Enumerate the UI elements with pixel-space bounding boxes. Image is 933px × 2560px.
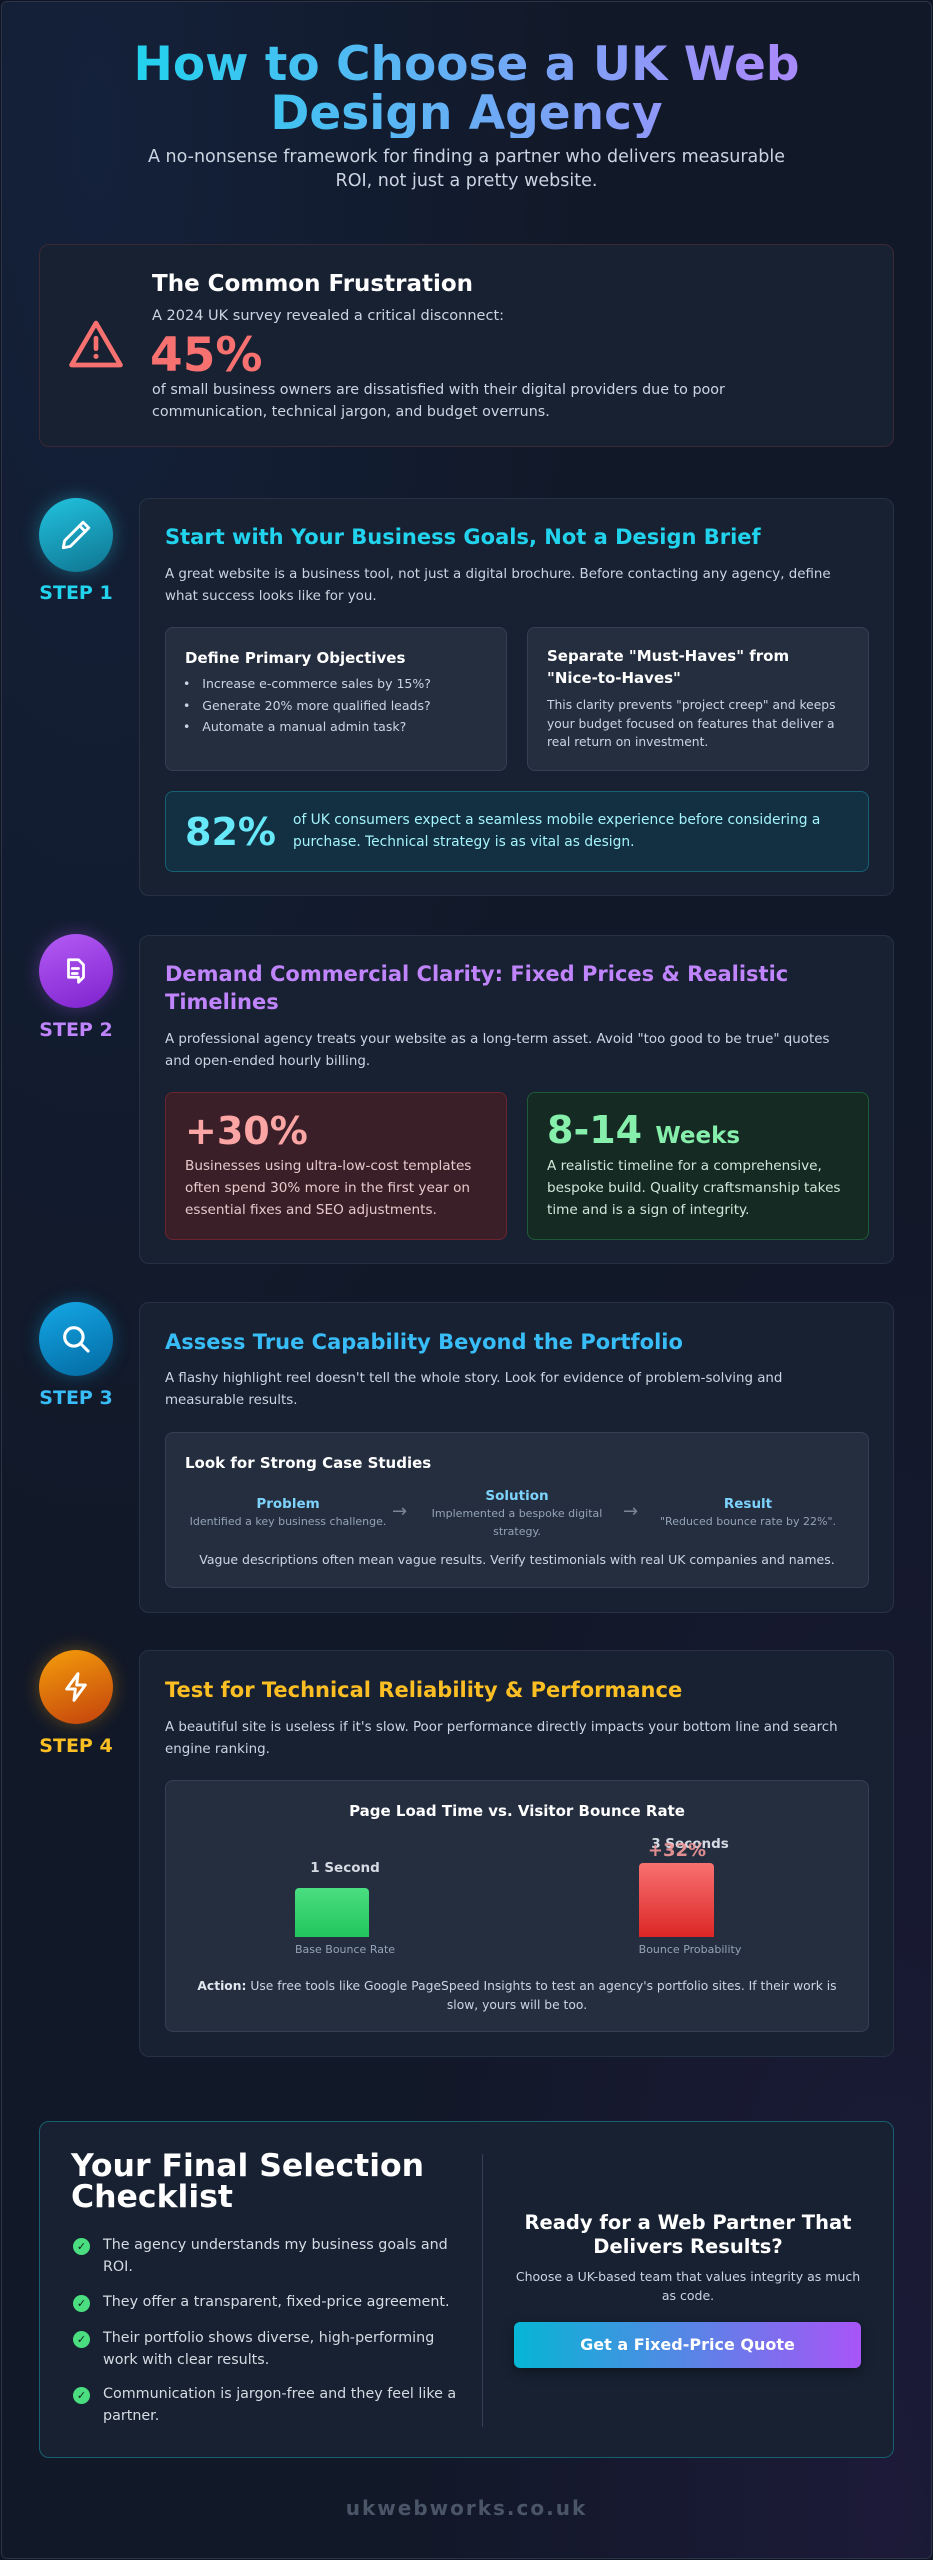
box: must-haves (527, 627, 869, 771)
heading (165, 962, 788, 1014)
stat 45%: 45% (150, 328, 262, 383)
stat callout: 82%: of UK consumers expect a seamless mobile experience before considering a (293, 812, 820, 828)
box: must-haves: your budget focused on features that deliver a (547, 716, 835, 730)
stat callout: 82% (165, 791, 869, 872)
note: Vague descriptions often mean vague results. Verify testimonials with real UK companies and names. (199, 1552, 835, 1567)
box: primary objectives: • Increase e-commerce sales by 15%? (183, 676, 431, 691)
step 2 label: STEP 2 (39, 1019, 113, 1041)
panel: step 4 (139, 1650, 894, 2057)
body text (165, 1371, 782, 1408)
body text: A flashy highlight reel doesn't tell the whole story. Look for evidence of problem-solving and (165, 1371, 782, 1386)
footer: ukwebworks.co.uk (346, 2496, 587, 2520)
description: of small business owners are dissatisfied with their digital providers due to poor (152, 382, 725, 398)
checklist items: ✓ (77, 2389, 86, 2402)
bar: 1 second: 1 Second (310, 1860, 380, 1876)
title: How to Choose a UK Web (134, 37, 800, 92)
body text: measurable results. (165, 1393, 298, 1408)
checklist heading: Checklist (71, 2179, 233, 2215)
box: must-haves: Separate "Must-Haves" from (547, 647, 789, 665)
box: +30%: essential fixes and SEO adjustments. (185, 1202, 437, 1218)
title (134, 37, 800, 141)
flow: solution: Solution (485, 1488, 549, 1504)
icon: step 3 search (39, 1302, 113, 1376)
bar chart: Base Bounce Rate (295, 1943, 395, 1956)
box: +30% (165, 1092, 507, 1240)
panel: common frustration (39, 244, 894, 447)
checklist items: ✓ (77, 2240, 86, 2253)
body text: and open-ended hourly billing. (165, 1054, 370, 1069)
box: primary objectives (165, 627, 507, 771)
checklist items: ROI. (103, 2258, 133, 2274)
box: 8-14 weeks (527, 1092, 869, 1240)
checklist items: partner. (103, 2408, 159, 2424)
panel: step 3 (139, 1302, 894, 1613)
CTA button (514, 2322, 861, 2368)
checklist heading: Your Final Selection (71, 2148, 424, 2184)
flow: problem (190, 1496, 386, 1528)
body text: engine ranking. (165, 1742, 270, 1757)
checklist items: They offer a transparent, fixed-price agreement. (103, 2294, 450, 2310)
box: must-haves: This clarity prevents "project creep" and keeps (547, 698, 836, 712)
flow: problem: Identified a key business challenge. (190, 1515, 386, 1528)
CTA heading: Ready for a Web Partner That (525, 2211, 851, 2234)
body text (165, 1720, 838, 1757)
heading: Assess True Capability Beyond the Portfolio (165, 1330, 683, 1354)
subtitle: A no-nonsense framework for finding a partner who delivers measurable (148, 147, 785, 167)
title: Design Agency (270, 86, 663, 141)
heading: Start with Your Business Goals, Not a Design Brief (165, 525, 761, 549)
body text (165, 1032, 829, 1069)
intro text: A 2024 UK survey revealed a critical disconnect: (152, 308, 504, 324)
action note (197, 1979, 837, 2012)
body text (165, 567, 831, 604)
CTA heading: Delivers Results? (593, 2235, 783, 2258)
checklist heading (70, 2148, 424, 2215)
bar chart (165, 1780, 869, 2032)
flow: solution (432, 1488, 602, 1538)
flow: result (660, 1496, 836, 1528)
CTA subtext: Choose a UK-based team that values integrity as much (516, 2269, 860, 2284)
flow: result: Result (724, 1496, 772, 1512)
panel: step 1 (139, 498, 894, 896)
subtitle: ROI, not just a pretty website. (336, 171, 597, 191)
box: 8-14 weeks: A realistic timeline for a comprehensive, (547, 1158, 822, 1174)
description: communication, technical jargon, and budget overruns. (152, 404, 550, 420)
box: +30%: +30% (185, 1109, 308, 1153)
action note: Action: Use free tools like Google PageSpeed Insights to test an agency's portfolio sites. If their work is (197, 1979, 837, 1993)
action note: slow, yours will be too. (447, 1998, 587, 2012)
flow: result: "Reduced bounce rate by 22%". (660, 1515, 836, 1528)
heading: Test for Technical Reliability & Performance (165, 1678, 682, 1702)
box: 8-14 weeks: bespoke build. Quality craftsmanship takes (547, 1180, 841, 1196)
box: +30%: Businesses using ultra-low-cost templates (185, 1158, 471, 1174)
description (152, 382, 725, 420)
checklist items: The agency understands my business goals and (103, 2237, 448, 2253)
box: primary objectives: • Generate 20% more qualified leads? (183, 698, 431, 712)
arrow: → (392, 1501, 407, 1522)
bar chart: Bounce Probability (639, 1943, 741, 1956)
box: +30%: often spend 30% more in the first year on (185, 1180, 470, 1196)
stat callout: 82%: 82% (185, 810, 276, 854)
box: 8-14 weeks: time and is a sign of integrity. (547, 1202, 749, 1218)
step 1 label: STEP 1 (39, 582, 113, 604)
box: case studies (165, 1432, 869, 1588)
checklist items: Communication is jargon-free and they feel like a (103, 2386, 456, 2402)
step 4 label: STEP 4 (39, 1735, 113, 1757)
box: must-haves: real return on investment. (547, 735, 708, 749)
arrow: → (623, 1501, 638, 1522)
panel: step 2 (139, 935, 894, 1264)
body text: what success looks like for you. (165, 589, 377, 604)
body text: A professional agency treats your website as a long-term asset. Avoid "too good to be true" quotes (165, 1032, 829, 1047)
icon: step 4 lightning (39, 1650, 113, 1724)
box: primary objectives: • Automate a manual admin task? (183, 719, 406, 734)
bar: 3 seconds: 3 Seconds (651, 1836, 729, 1852)
subtitle (148, 147, 785, 191)
CTA button: Get a Fixed-Price Quote (580, 2335, 795, 2354)
CTA subtext (516, 2269, 860, 2303)
step 3 label: STEP 3 (39, 1387, 113, 1409)
checklist items: work with clear results. (103, 2352, 269, 2368)
icon: warning (69, 320, 123, 368)
bar chart: +32% (648, 1840, 706, 1861)
flow: problem: Problem (256, 1496, 320, 1512)
icon: step 1 pencil (39, 498, 113, 572)
body text: A great website is a business tool, not just a digital brochure. Before contacting any agency, define (165, 567, 831, 582)
icon: step 2 document (39, 934, 113, 1008)
flow: solution: Implemented a bespoke digital (432, 1507, 602, 1520)
bar chart: Page Load Time vs. Visitor Bounce Rate (349, 1802, 685, 1820)
flow: solution: strategy. (493, 1525, 541, 1538)
box: primary objectives: Define Primary Objectives (185, 649, 405, 667)
stat callout: 82%: purchase. Technical strategy is as vital as design. (293, 834, 634, 850)
heading: Timelines (165, 990, 279, 1014)
box: must-haves: "Nice-to-Haves" (547, 669, 681, 687)
heading: The Common Frustration (152, 271, 473, 297)
panel: final checklist (39, 2121, 894, 2458)
checklist items (73, 2237, 456, 2424)
checklist items: ✓ (77, 2333, 86, 2346)
box: case studies: Look for Strong Case Studies (185, 1454, 431, 1472)
CTA subtext: as code. (662, 2288, 714, 2303)
CTA heading (525, 2211, 851, 2258)
heading: Demand Commercial Clarity: Fixed Prices & Realistic (165, 962, 788, 986)
checklist items: Their portfolio shows diverse, high-performing (103, 2330, 434, 2346)
box: 8-14 weeks: 8-14 Weeks (547, 1108, 740, 1152)
body text: A beautiful site is useless if it's slow. Poor performance directly impacts your bottom line and search (165, 1720, 838, 1735)
checklist items: ✓ (77, 2297, 86, 2310)
